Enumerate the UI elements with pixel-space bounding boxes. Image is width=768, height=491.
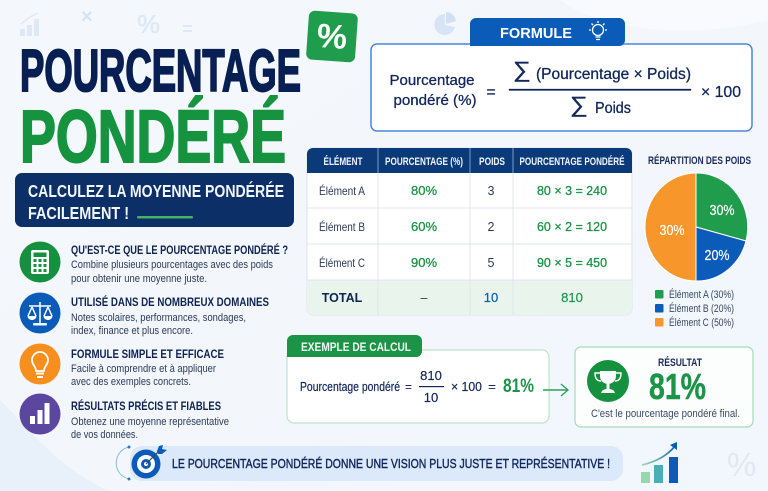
table rows: 5 bbox=[488, 256, 495, 270]
example equation: 810 bbox=[420, 368, 442, 383]
example equation: = bbox=[488, 379, 496, 394]
title: POURCENTAGE bbox=[20, 38, 301, 104]
panel: formula bbox=[371, 18, 752, 131]
item: simple formula: Facile à comprendre et à appliquer bbox=[71, 363, 216, 375]
pie chart: weights bbox=[645, 154, 751, 329]
item: reliable results: Obtenez une moyenne représentative bbox=[71, 416, 229, 428]
table rows: Élément A bbox=[319, 183, 365, 198]
icon: target bbox=[116, 445, 167, 480]
item: domains: index, finance et plus encore. bbox=[71, 325, 193, 337]
item: definition: Combine plusieurs pourcentages avec des poids bbox=[71, 259, 273, 271]
background decorations: × bbox=[81, 6, 93, 28]
pie chart: weights: 30% bbox=[710, 202, 734, 219]
panel: result: C'est le pourcentage pondéré final. bbox=[591, 408, 740, 420]
formula expression: × 100 bbox=[701, 84, 741, 101]
table rows: 90 × 5 = 450 bbox=[537, 255, 607, 270]
title bbox=[20, 38, 301, 178]
formula tab bbox=[470, 18, 625, 46]
item: definition: pour obtenir une moyenne juste. bbox=[71, 273, 207, 285]
item: reliable results: RÉSULTATS PRÉCIS ET FIABLES bbox=[71, 398, 221, 413]
pie legend: Élément B (20%) bbox=[669, 302, 734, 315]
arrow: to result bbox=[543, 384, 568, 396]
table rows bbox=[319, 183, 607, 305]
formula expression: Pourcentage bbox=[390, 72, 474, 89]
table rows: 10 bbox=[484, 290, 498, 305]
example tab bbox=[287, 335, 422, 357]
panel: calculation example bbox=[287, 335, 549, 423]
subtitle banner: FACILEMENT ! bbox=[28, 203, 129, 223]
formula expression: pondéré (%) bbox=[394, 92, 477, 109]
formula tab: FORMULE bbox=[500, 25, 572, 42]
percent badge: % bbox=[316, 17, 348, 57]
item: simple formula: avec des exemples concrets. bbox=[71, 376, 191, 388]
example equation: = bbox=[405, 380, 412, 394]
pie legend: Élément C (50%) bbox=[669, 316, 734, 329]
item: definition bbox=[20, 242, 288, 285]
table total row bbox=[307, 280, 632, 315]
formula expression: = bbox=[486, 84, 496, 101]
example equation: 81% bbox=[503, 376, 534, 397]
pie legend bbox=[655, 288, 734, 329]
table rows: 80 × 3 = 240 bbox=[537, 183, 607, 198]
item: simple formula: FORMULE SIMPLE ET EFFICACE bbox=[71, 347, 224, 361]
table rows: 80% bbox=[411, 183, 437, 198]
panel: result: 81% bbox=[649, 366, 706, 407]
table rows: TOTAL bbox=[322, 291, 363, 305]
pie legend: Élément A (30%) bbox=[669, 288, 734, 301]
table rows: 90% bbox=[411, 255, 437, 270]
formula expression: Poids bbox=[595, 100, 631, 117]
background percent sign: % bbox=[727, 446, 756, 483]
table header: POIDS bbox=[479, 156, 505, 168]
panel: result bbox=[575, 347, 753, 427]
icon: growth chart bbox=[641, 442, 678, 483]
item: domains bbox=[20, 292, 269, 337]
table rows: 60 × 2 = 120 bbox=[537, 219, 607, 234]
table rows: Élément C bbox=[319, 255, 365, 270]
table rows: Élément B bbox=[319, 219, 365, 234]
table rows: 3 bbox=[488, 184, 495, 198]
formula expression: (Pourcentage × Poids) bbox=[536, 66, 691, 83]
table header: POURCENTAGE (%) bbox=[385, 156, 463, 168]
formula expression bbox=[390, 57, 741, 117]
example tab: EXEMPLE DE CALCUL bbox=[301, 340, 411, 354]
item: definition: QU'EST-CE QUE LE POURCENTAGE PONDÉRÉ ? bbox=[71, 242, 288, 257]
bottom banner: LE POURCENTAGE PONDÉRÉ DONNE UNE VISION PLUS JUSTE ET REPRÉSENTATIVE ! bbox=[172, 456, 610, 471]
example equation: × 100 bbox=[451, 379, 482, 394]
subtitle banner: CALCULEZ LA MOYENNE PONDÉRÉE bbox=[28, 180, 284, 201]
item: simple formula bbox=[20, 344, 224, 388]
table header: ÉLÉMENT bbox=[324, 155, 363, 168]
formula expression: ∑ bbox=[570, 92, 588, 117]
panel: benefits list bbox=[20, 242, 288, 441]
table header bbox=[307, 148, 632, 173]
example equation bbox=[300, 368, 534, 405]
subtitle banner bbox=[15, 173, 294, 227]
example equation: Pourcentage pondéré bbox=[300, 380, 400, 394]
table rows: 60% bbox=[411, 219, 437, 234]
pie chart: weights: 30% bbox=[660, 222, 684, 239]
table header: POURCENTAGE PONDÉRÉ bbox=[520, 155, 624, 168]
formula expression: ∑ bbox=[513, 57, 531, 82]
item: reliable results bbox=[20, 394, 229, 441]
item: domains: Notes scolaires, performances, sondages, bbox=[71, 312, 246, 324]
panel: result: RÉSULTAT bbox=[658, 356, 702, 369]
pie chart: weights: 20% bbox=[704, 247, 730, 264]
item: reliable results: de vos données. bbox=[71, 429, 138, 441]
background decorations: % bbox=[137, 9, 160, 39]
icon: trophy bbox=[587, 360, 629, 402]
title: PONDÉRÉ bbox=[20, 95, 286, 178]
table rows: – bbox=[421, 291, 428, 305]
table rows: 810 bbox=[561, 290, 583, 305]
background decorations bbox=[20, 6, 456, 39]
table rows: 2 bbox=[488, 220, 495, 234]
example equation: 10 bbox=[424, 390, 438, 405]
item: domains: UTILISÉ DANS DE NOMBREUX DOMAINES bbox=[71, 294, 269, 309]
table: weighted percentages bbox=[307, 148, 632, 315]
bottom banner bbox=[116, 445, 623, 481]
percent badge bbox=[306, 10, 358, 63]
